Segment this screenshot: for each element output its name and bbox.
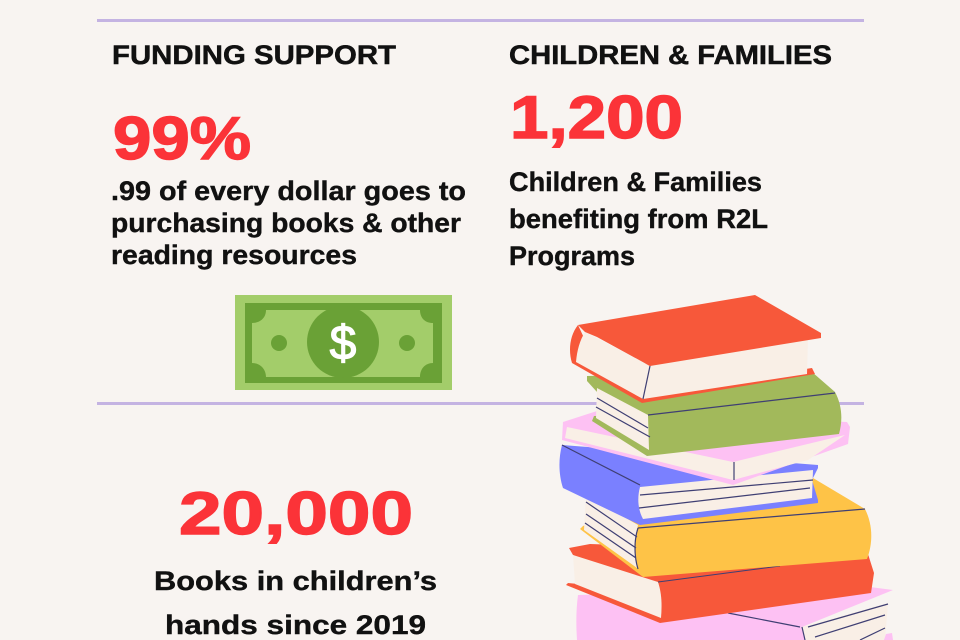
icon: dollar bill	[235, 295, 452, 390]
text: children description: Children & Families	[509, 167, 762, 197]
book: green	[587, 372, 841, 456]
panel: funding support	[111, 40, 466, 270]
text: funding description: .99 of every dollar goes to	[111, 176, 466, 206]
text: books description	[154, 566, 437, 640]
illustration: stack of books	[559, 295, 893, 640]
text: funding description: purchasing books & other	[111, 208, 462, 238]
text: funding description: reading resources	[111, 240, 357, 270]
heading: children and families: CHILDREN & FAMILIES	[509, 40, 832, 70]
book: blue	[559, 445, 818, 525]
book: pink middle	[562, 411, 850, 485]
text: children description: Programs	[509, 241, 635, 271]
heading: funding support: FUNDING SUPPORT	[112, 40, 397, 70]
text: books description: hands since 2019	[165, 610, 426, 640]
icon: dollar bill: $	[330, 317, 356, 370]
stat: 1,200: 1,200	[510, 84, 683, 151]
book: red top	[570, 295, 821, 403]
text: funding description	[111, 176, 466, 270]
stat: 20,000: 20,000	[179, 480, 413, 547]
stat: 99%: 99%	[113, 105, 251, 172]
book: red lower	[566, 544, 874, 623]
text: books description: Books in children’s	[154, 566, 437, 596]
text: children description: benefiting from R2L	[509, 204, 768, 234]
book: pink bottom	[576, 587, 893, 640]
panel: books in hands	[154, 480, 437, 640]
panel: children and families	[509, 40, 832, 271]
book: yellow	[580, 478, 871, 577]
text: children description	[509, 167, 768, 271]
